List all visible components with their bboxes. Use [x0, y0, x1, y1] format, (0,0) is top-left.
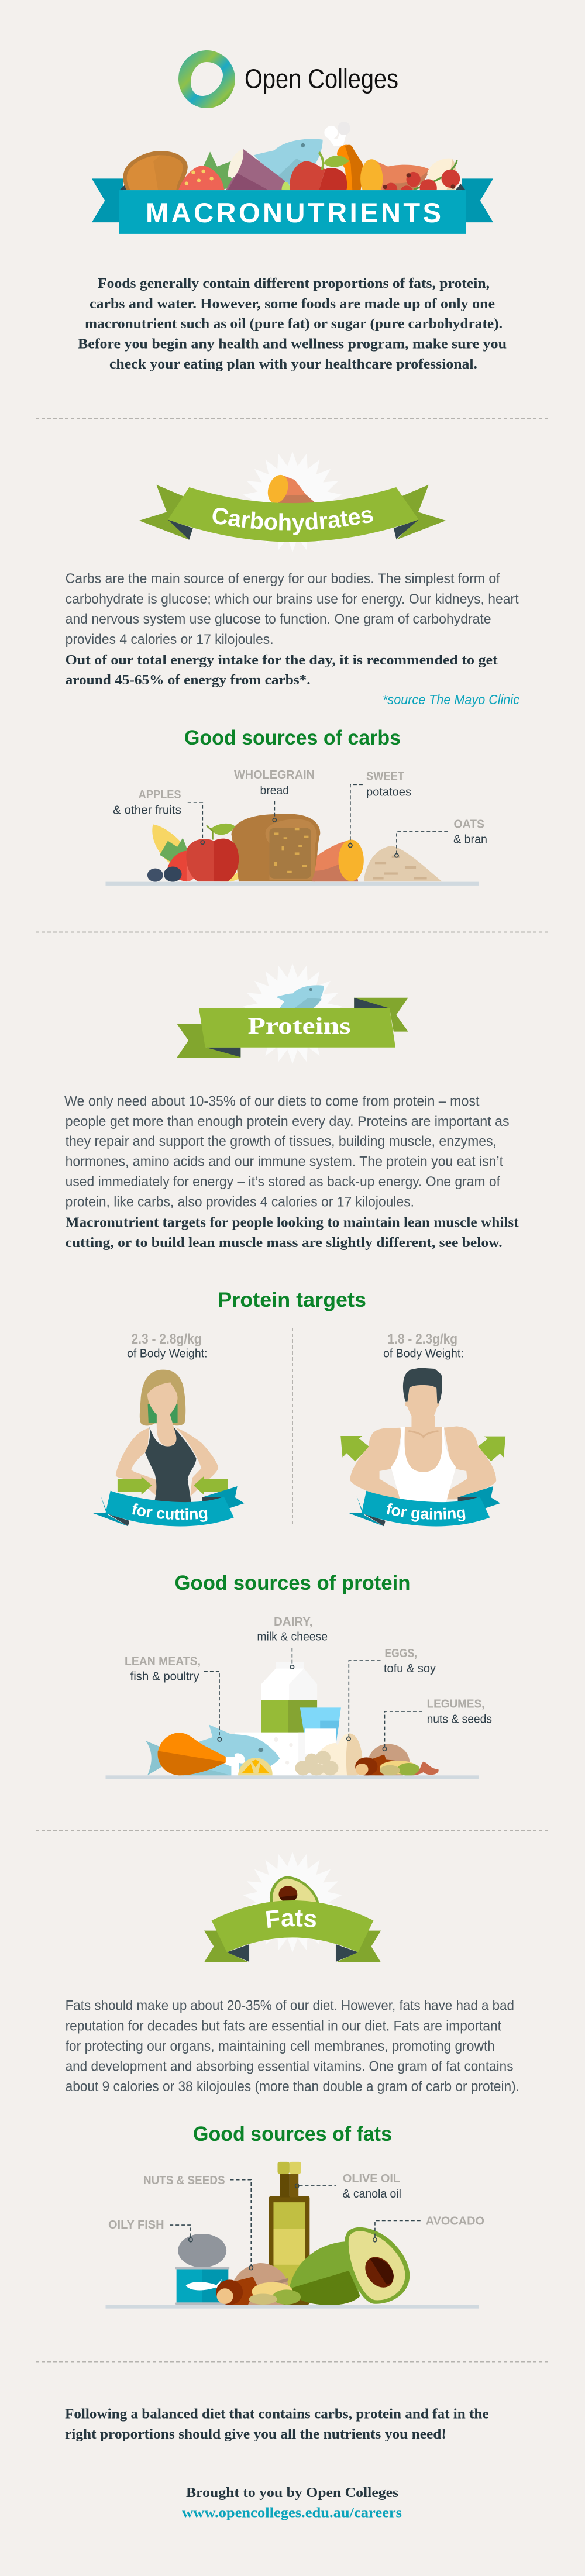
- banner: carbohydrates: [139, 452, 446, 552]
- text: fats body: for protecting our organs, maintaining cell membranes, promoting growth: [66, 2038, 495, 2054]
- chart: carb foods: [105, 769, 487, 886]
- text: protein body: [64, 1093, 519, 1251]
- labels: & canola oil: [343, 2188, 401, 2200]
- labels: SWEET: [366, 770, 404, 783]
- ribbon text: for gaining: [387, 1503, 466, 1522]
- icon: sweet potato: [278, 476, 317, 504]
- hair: [140, 1370, 185, 1425]
- intro paragraph: Before you begin any health and wellness program, make sure you: [78, 337, 507, 352]
- ribbon shape: [177, 985, 408, 1058]
- strawberry: [204, 152, 233, 190]
- text: fats body: about 9 calories or 38 kilojoules (more than double a gram of carb or protein).: [66, 2079, 519, 2095]
- closing statement: [65, 2406, 489, 2442]
- text: protein body: We only need about 10-35% of our diets to come from protein – most: [64, 1093, 480, 1109]
- text: protein body: Macronutrient targets for people looking to maintain lean muscle whilst: [66, 1215, 519, 1230]
- labels: [113, 769, 487, 846]
- arms: [350, 1428, 402, 1499]
- avocado back: [289, 2241, 360, 2305]
- blueberries: [147, 869, 163, 882]
- apple: [186, 839, 214, 881]
- text: carbs body: [66, 571, 519, 688]
- text: carbs body: provides 4 calories or 17 kilojoules.: [66, 632, 274, 648]
- chart: fat foods: [105, 2162, 484, 2309]
- cheese: [235, 1733, 315, 1775]
- closing statement: Following a balanced diet that contains carbs, protein and fat in the: [65, 2406, 489, 2422]
- egg and tofu: [312, 1733, 363, 1775]
- labels: body weight targets: of Body Weight:: [127, 1348, 208, 1361]
- food illustration: [105, 1648, 479, 1779]
- ribbon band: [119, 190, 466, 234]
- potato: [377, 161, 429, 190]
- footer credit: www.opencolleges.edu.au/careers: [182, 2506, 402, 2521]
- banner: fats: [204, 1852, 381, 1962]
- avocado front: [345, 2227, 410, 2304]
- section: proteins: [64, 964, 519, 1779]
- labels: OATS: [454, 818, 484, 831]
- sunburst: [243, 1852, 342, 1952]
- sunburst: [243, 452, 342, 552]
- tank top: [145, 1427, 196, 1503]
- icon: avocado: [270, 1876, 319, 1903]
- text: protein body: they repair and support the growth of tissues, building muscle, enzymes,: [66, 1134, 497, 1149]
- labels: EGGS,: [385, 1647, 417, 1660]
- sunburst: [243, 963, 342, 1064]
- heading: protein targets: Protein targets: [218, 1289, 366, 1311]
- chart: protein foods: [105, 1616, 492, 1779]
- callout lines: [204, 1671, 219, 1738]
- icon: fish: [276, 985, 324, 1008]
- text: carbs body: Out of our total energy intake for the day, it is recommended to get: [66, 653, 498, 668]
- ribbon: [349, 1486, 500, 1526]
- banner text: Fats: [266, 1910, 316, 1928]
- banner text: Proteins: [248, 1013, 351, 1039]
- icon: ring: [178, 50, 235, 108]
- intro paragraph: Foods generally contain different proportions of fats, protein,: [98, 276, 490, 291]
- labels: AVOCADO: [426, 2215, 484, 2228]
- walnut: [367, 1744, 410, 1775]
- intro paragraph: macronutrient such as oil (pure fat) or sugar (pure carbohydrate).: [85, 316, 503, 332]
- ribbon: [92, 1486, 245, 1526]
- shelf: [105, 2305, 479, 2309]
- milk bottle: [276, 1662, 304, 1669]
- ribbon shape: [204, 1876, 381, 1962]
- labels: NUTS & SEEDS: [143, 2174, 225, 2187]
- sweet potato slice: [226, 149, 285, 190]
- egg: [427, 158, 452, 190]
- figure: for gaining: [340, 1368, 505, 1527]
- bread: [123, 151, 188, 194]
- text: protein body: cutting, or to build lean muscle mass are slightly different, see below.: [66, 1235, 503, 1251]
- labels: LEGUMES,: [427, 1698, 484, 1711]
- labels: [125, 1616, 492, 1726]
- wordmark: Open Colleges: [245, 63, 398, 94]
- labels: [108, 2172, 484, 2231]
- section: fats: [66, 1852, 519, 2309]
- intro paragraph: carbs and water. However, some foods are made up of only one: [90, 297, 495, 312]
- food pile: [123, 126, 460, 191]
- hazelnut: [231, 2277, 257, 2305]
- labels: milk & cheese: [257, 1631, 328, 1644]
- labels: body weight targets: 2.3 - 2.8g/kg: [131, 1331, 201, 1347]
- labels: fish & poultry: [130, 1670, 199, 1683]
- neck and face: [157, 1414, 177, 1447]
- arms: [116, 1428, 160, 1501]
- text: carbs body: and nervous system use glucose to function. One gram of carbohydrate: [66, 611, 491, 627]
- figure: for cutting: [92, 1370, 245, 1527]
- fish: [254, 139, 323, 186]
- food illustration: [105, 784, 479, 886]
- section: carbohydrates: [66, 452, 519, 886]
- text: fats body: and development and absorbing essential vitamins. One gram of fat contains: [66, 2059, 514, 2075]
- chest and neck: [405, 1416, 442, 1472]
- text: fats body: Fats should make up about 20-35% of our diet. However, fats have had a bad: [66, 1998, 514, 2014]
- text: protein body: protein, like carbs, also provides 4 calories or 17 kilojoules.: [66, 1194, 414, 1210]
- chicken: [324, 129, 346, 146]
- ribbon tails: [92, 178, 493, 222]
- glass: [300, 1707, 341, 1745]
- labels: WHOLEGRAIN: [234, 769, 315, 781]
- text: protein body: people get more than enough protein every day. Proteins are important as: [66, 1114, 510, 1129]
- white tank: [391, 1427, 456, 1503]
- labels: potatoes: [366, 786, 411, 799]
- ribbon shape: [139, 473, 446, 542]
- oats: [364, 846, 442, 881]
- labels: body weight targets: [127, 1331, 464, 1361]
- walnut: [232, 2263, 288, 2305]
- text: carbs body: carbohydrate is glucose; which our brains use for energy. Our kidneys, heart: [66, 591, 519, 607]
- labels: OILY FISH: [108, 2219, 164, 2231]
- soy beans: [295, 1751, 338, 1775]
- olive oil bottle: [269, 2196, 309, 2305]
- intro paragraph: check your eating plan with your healthcare professional.: [109, 357, 477, 372]
- labels: body weight targets: 1.8 - 2.3g/kg: [388, 1331, 457, 1347]
- logo: Open Colleges: [178, 50, 398, 108]
- title banner: [92, 122, 493, 234]
- source note: *source The Mayo Clinic: [383, 692, 519, 707]
- banner: proteins: [177, 963, 408, 1064]
- shelf: [105, 1775, 479, 1779]
- labels: & other fruits: [113, 804, 181, 817]
- pistachio: [380, 1761, 417, 1774]
- text: protein body: hormones, amino acids and our immune system. The protein you eat isn’t: [66, 1154, 503, 1170]
- face: [405, 1385, 439, 1425]
- banner food and ribbon: [92, 122, 493, 234]
- labels: & bran: [453, 834, 487, 846]
- text: protein body: used immediately for energy – it’s stored as back-up energy. One gram of: [66, 1174, 500, 1190]
- labels: tofu & soy: [384, 1662, 436, 1675]
- callout lines: [188, 803, 202, 841]
- labels: nuts & seeds: [427, 1713, 492, 1726]
- apple: [290, 161, 325, 190]
- hazelnut: [366, 1754, 395, 1775]
- poultry leg: [224, 1753, 245, 1775]
- shelf: [105, 882, 479, 886]
- pistachio: [252, 2282, 293, 2301]
- ribbon text: for cutting: [132, 1503, 207, 1522]
- footer credit: Brought to you by Open Colleges: [186, 2485, 398, 2501]
- text: fats body: [66, 1998, 519, 2095]
- food illustration: [105, 2162, 479, 2309]
- lemon: [238, 1758, 273, 1775]
- labels: DAIRY,: [274, 1616, 312, 1628]
- text: carbs body: around 45-65% of energy from carbs*.: [66, 673, 311, 688]
- heading: good sources of carbs: Good sources of carbs: [184, 726, 401, 749]
- footer credit: [182, 2485, 402, 2521]
- labels: bread: [260, 784, 289, 797]
- heading: good sources of protein: Good sources of protein: [174, 1572, 411, 1594]
- labels: OLIVE OIL: [343, 2172, 400, 2185]
- cashew: [412, 1762, 439, 1775]
- closing statement: right proportions should give you all the nutrients you need!: [65, 2427, 446, 2442]
- heading: good sources of fats: Good sources of fats: [193, 2123, 392, 2145]
- sweet potato: [314, 841, 358, 881]
- bread: [231, 814, 320, 881]
- callout lines: [230, 2180, 251, 2265]
- strawberry: [168, 851, 199, 881]
- labels: body weight targets: of Body Weight:: [383, 1348, 464, 1361]
- fish tin: [178, 2234, 226, 2267]
- labels: LEAN MEATS,: [125, 1655, 201, 1668]
- text: carbs body: Carbs are the main source of energy for our bodies. The simplest form of: [66, 571, 500, 587]
- arrows: [340, 1436, 505, 1461]
- hair: [403, 1368, 442, 1403]
- text: fats body: reputation for decades but fats are essential in our diet. Fats are important: [66, 2018, 501, 2034]
- labels: APPLES: [139, 788, 181, 801]
- banner text: Carbohydrates: [212, 508, 373, 535]
- cherries: [414, 160, 457, 190]
- arrows: [118, 1476, 228, 1494]
- title text: MACRONUTRIENTS: [146, 197, 441, 228]
- fish: [183, 1724, 280, 1775]
- intro paragraph: [78, 276, 507, 372]
